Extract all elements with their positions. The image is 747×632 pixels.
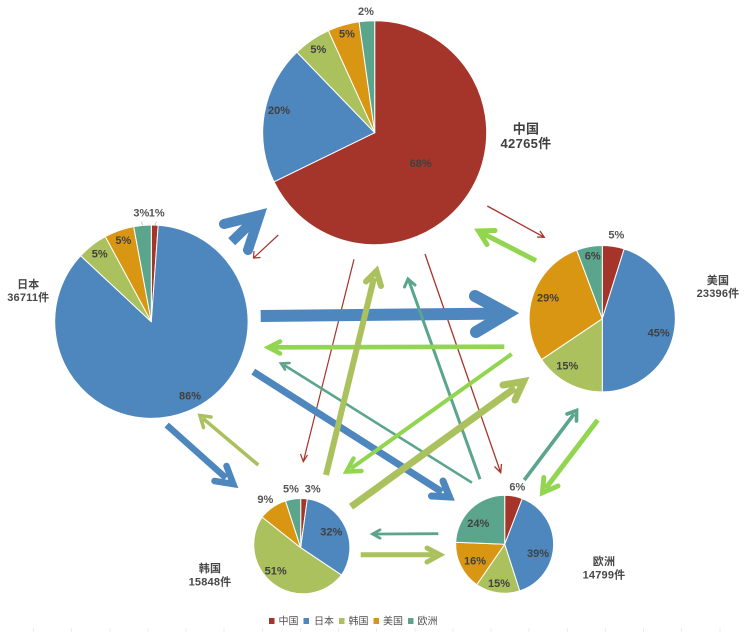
arrow: USA to Europe xyxy=(542,420,598,493)
slice: Europe 3% xyxy=(134,225,151,322)
label: USA total: 23396件 xyxy=(697,286,739,300)
arrow: Europe to China xyxy=(404,279,480,479)
slice: Europe 6% xyxy=(577,245,602,319)
slice: China 68% xyxy=(274,21,487,245)
value labels: Europe: 6% xyxy=(509,482,525,494)
slice: Korea 5% xyxy=(297,31,375,133)
pie: China xyxy=(263,6,487,245)
legend: 韩国 xyxy=(348,614,368,628)
slice: Korea 15% xyxy=(542,319,602,392)
slice: USA 9% xyxy=(262,501,301,548)
arrow: Korea to Japan xyxy=(200,416,258,465)
arrow: China to Europe xyxy=(425,254,502,473)
value labels: Europe: 15% xyxy=(488,578,510,590)
value labels: Korea: 5% xyxy=(283,484,299,496)
value labels: USA: 29% xyxy=(537,293,559,305)
value labels: China xyxy=(268,6,432,170)
pie: Japan xyxy=(55,207,248,418)
value labels: USA xyxy=(537,230,670,373)
slice: Japan 20% xyxy=(263,52,375,182)
slice: USA 5% xyxy=(105,227,151,322)
arrow: Japan to Europe xyxy=(253,372,450,497)
arrow: USA to Korea xyxy=(346,354,512,472)
value labels: Japan: 3% xyxy=(133,207,149,219)
slice: Japan 86% xyxy=(55,225,248,418)
label: Japan total: 36711件 xyxy=(7,290,49,304)
value labels: China: 20% xyxy=(268,105,290,117)
slice: China 5% xyxy=(602,246,624,319)
slice: USA 16% xyxy=(456,542,505,585)
slice: Japan 45% xyxy=(602,249,675,392)
slice: USA 5% xyxy=(328,22,375,133)
value labels: China: 68% xyxy=(410,158,432,170)
value labels: Korea: 32% xyxy=(320,527,343,539)
label: China total xyxy=(501,122,551,151)
value labels: Japan: 86% xyxy=(179,391,201,403)
pie: Europe xyxy=(456,482,554,593)
value labels: Europe: 16% xyxy=(464,556,486,568)
pie: USA xyxy=(529,230,675,392)
arrow: Japan to USA xyxy=(261,296,507,332)
arrow: Korea to Europe xyxy=(361,548,440,562)
arrow: Europe to Korea xyxy=(372,530,438,538)
slice: Japan 32% xyxy=(301,499,350,575)
value labels: Europe: 39% xyxy=(527,548,549,560)
legend: 美国 xyxy=(383,614,403,628)
value labels: Korea: 9% xyxy=(257,494,273,506)
value labels: Europe xyxy=(464,482,549,590)
value labels: Japan: 5% xyxy=(92,248,108,260)
value labels: China: 5% xyxy=(310,44,326,56)
pie: Korea xyxy=(254,483,350,594)
value labels: China: 2% xyxy=(358,6,374,18)
arrow: Europe to Japan xyxy=(281,363,472,483)
value labels: Japan: 5% xyxy=(115,235,131,247)
slice: China 6% xyxy=(505,495,522,544)
arrow: Japan to Korea xyxy=(167,425,233,484)
label: Japan total xyxy=(7,277,49,304)
label: Europe total xyxy=(583,554,625,582)
value labels: USA: 6% xyxy=(585,251,601,263)
label: USA total: 美国 xyxy=(707,273,729,287)
value labels: Europe: 24% xyxy=(467,518,490,530)
label: Japan total: 日本 xyxy=(17,277,40,291)
arrow: Korea to China xyxy=(326,271,381,475)
slice: Japan 39% xyxy=(505,499,554,591)
slice: Korea 15% xyxy=(477,544,520,593)
arrow: Europe to USA xyxy=(524,410,577,480)
value labels: Japan: 1% xyxy=(149,207,165,219)
arrow: Korea to USA xyxy=(351,382,524,507)
value labels: USA: 15% xyxy=(556,361,579,373)
value labels: USA: 45% xyxy=(648,328,670,340)
slice: Europe 24% xyxy=(456,495,505,544)
label: USA total xyxy=(697,273,739,300)
label: China total: 42765件 xyxy=(501,136,551,151)
slice: Korea 5% xyxy=(81,237,151,322)
value labels: Korea xyxy=(257,483,343,578)
value labels: USA: 5% xyxy=(608,230,624,242)
value labels: Japan xyxy=(92,207,201,403)
arrow: China to Korea xyxy=(300,259,354,462)
label: Korea total: 韩国 xyxy=(199,561,221,575)
arrow: USA to China xyxy=(478,230,536,261)
value labels: Korea: 51% xyxy=(265,566,287,578)
slice: Korea 51% xyxy=(254,517,342,594)
slice: China 3% xyxy=(301,498,307,548)
slice: Europe 2% xyxy=(359,21,375,133)
arrow: USA to Japan xyxy=(268,342,504,354)
label: Korea total: 15848件 xyxy=(189,574,231,588)
label: China total: 中国 xyxy=(513,122,539,136)
legend: 中国 xyxy=(278,614,298,628)
legend: 欧洲 xyxy=(418,616,438,628)
legend xyxy=(269,614,438,628)
label: Europe total: 欧洲 xyxy=(593,554,615,568)
arrow: China to Japan xyxy=(254,235,278,258)
arrow: Japan to China xyxy=(224,215,260,250)
label: Korea total xyxy=(189,561,231,588)
slice: China 1% xyxy=(151,225,158,322)
slice: Europe 5% xyxy=(286,498,301,548)
value labels: Korea: 3% xyxy=(305,483,321,495)
value labels: China: 5% xyxy=(339,29,355,41)
legend: 日本 xyxy=(314,614,334,628)
slice: USA 29% xyxy=(529,250,602,360)
label: Europe total: 14799件 xyxy=(583,568,625,582)
arrow: China to USA xyxy=(487,206,544,237)
